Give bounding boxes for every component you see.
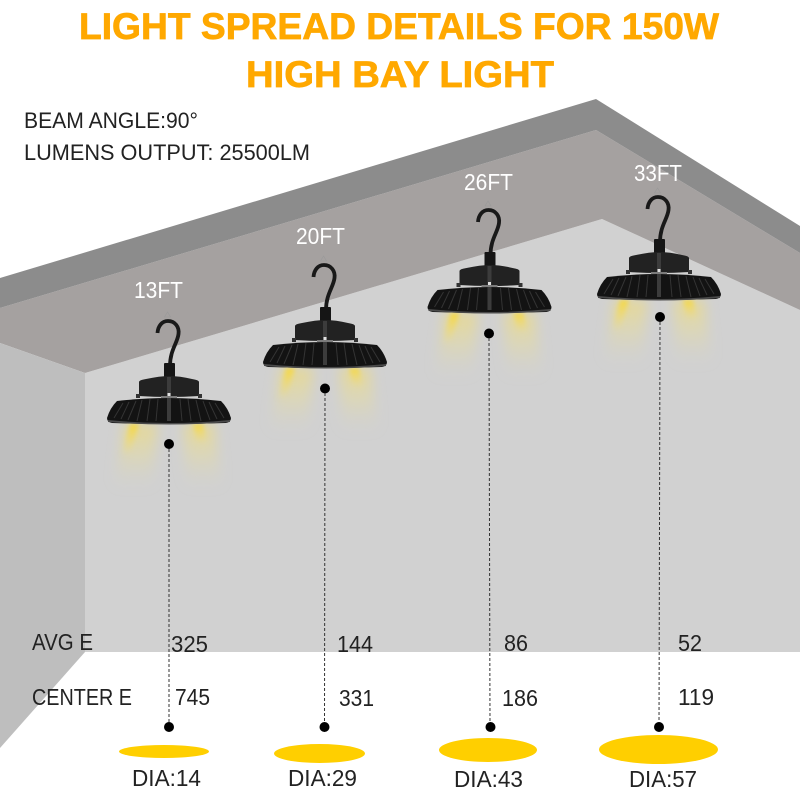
average illuminance row: AVG E [32,629,93,655]
floor spot: DIA 14: DIA:14 [132,765,201,791]
title: LIGHT SPREAD DETAILS FOR 150W [79,6,719,47]
specifications text: LUMENS OUTPUT: 25500LM [24,140,310,165]
title [79,6,719,95]
average illuminance row: 52 [678,630,702,656]
average illuminance row: 325 [171,631,208,657]
light: 13FT [107,277,231,726]
floor spot: DIA 29: DIA:29 [288,765,357,791]
light: 26FT [428,169,552,726]
light: 26FT: 26FT [464,169,513,195]
left wall [0,343,85,748]
title: HIGH BAY LIGHT [246,54,554,95]
center illuminance row: 119 [678,684,714,710]
floor spot: DIA 43: DIA:43 [454,766,523,792]
roof band [0,99,800,308]
center illuminance row: 331 [339,685,374,711]
floor spot: DIA 43 [439,722,537,792]
center illuminance row [32,684,714,711]
center illuminance row: 186 [502,685,538,711]
light: 33FT: 33FT [634,160,682,186]
floor spot: DIA 14 [119,722,209,791]
average illuminance row: 86 [504,630,528,656]
light: 20FT [263,223,387,726]
floor spot: DIA 29 [274,722,365,791]
light: 20FT: 20FT [296,223,345,249]
floor spot: DIA 57 [599,722,718,792]
ceiling [0,130,800,373]
specifications text [24,108,310,165]
center illuminance row: CENTER E [32,684,132,710]
floor spot: DIA 57: DIA:57 [629,766,697,792]
light: 13FT: 13FT [134,277,183,303]
center illuminance row: 745 [175,684,210,710]
average illuminance row: 144 [337,631,373,657]
back wall [85,219,800,652]
light: 33FT [597,160,721,726]
specifications text: BEAM ANGLE:90° [24,108,198,133]
average illuminance row [32,629,702,657]
